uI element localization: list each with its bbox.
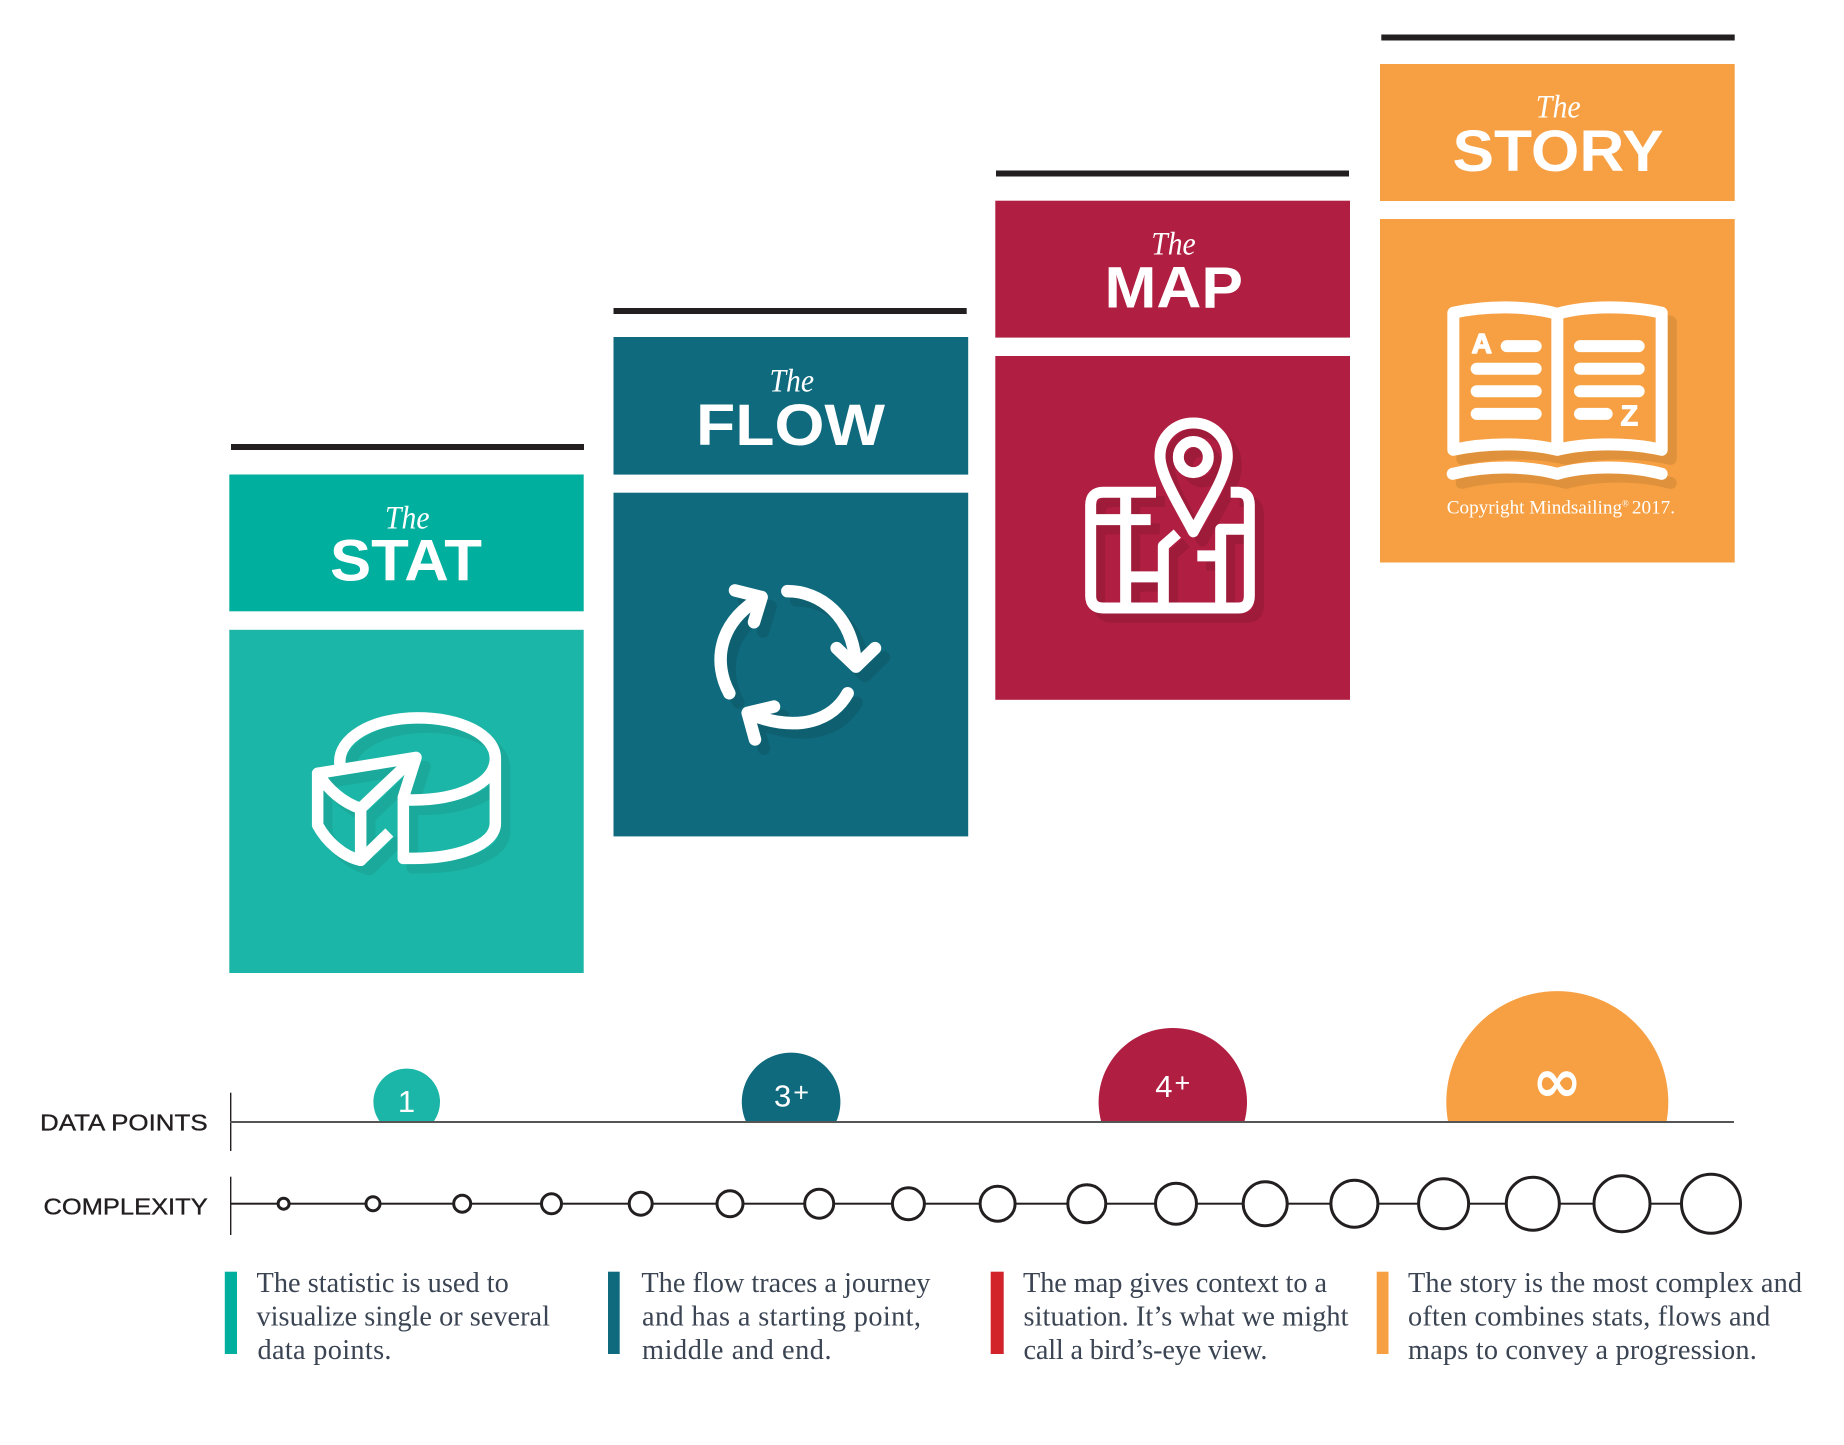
header: the story: STORY xyxy=(1452,119,1664,184)
label: data points: DATA POINTS xyxy=(40,1110,208,1136)
description: map: The map gives context to a xyxy=(1023,1268,1327,1299)
header: the stat xyxy=(229,474,584,611)
description: stat xyxy=(225,1268,550,1366)
header: the stat: The xyxy=(385,500,430,536)
body: the flow xyxy=(614,493,968,836)
header: the story: The xyxy=(1536,89,1581,125)
bubble: 4+ xyxy=(1099,1028,1247,1122)
description: story: maps to convey a progression. xyxy=(1408,1335,1757,1366)
panel: the flow xyxy=(614,308,968,836)
description: stat: data points. xyxy=(258,1335,392,1366)
bubble: 1: 1 xyxy=(398,1084,415,1119)
icon: open book: A xyxy=(1472,328,1492,359)
bubble: 1 xyxy=(373,1069,440,1122)
description: flow: and has a starting point, xyxy=(642,1302,921,1332)
header: the story xyxy=(1380,64,1735,201)
panel: the map xyxy=(995,170,1350,700)
bubble: 4+: 4 xyxy=(1155,1069,1173,1104)
icon: open book xyxy=(1453,307,1671,483)
description: story: The story is the most complex and xyxy=(1408,1268,1802,1299)
header: the map xyxy=(995,201,1350,338)
icon: cycle arrows xyxy=(721,590,884,749)
description: story: often combines stats, flows and xyxy=(1408,1302,1770,1332)
icon: open book: Z xyxy=(1620,400,1638,432)
header: the flow: The xyxy=(770,363,814,399)
copyright: 2017. xyxy=(1632,498,1675,518)
description: map: situation. It’s what we might xyxy=(1024,1302,1349,1332)
description: story xyxy=(1377,1268,1802,1366)
copyright: ® xyxy=(1622,498,1629,508)
body: the map xyxy=(995,356,1350,700)
panel: the story xyxy=(1380,34,1735,562)
body: the stat xyxy=(229,630,584,973)
chart: data points axis and bubbles xyxy=(230,991,1734,1151)
header: the flow: FLOW xyxy=(696,393,886,458)
bubble: 3+: + xyxy=(793,1078,809,1108)
header: the flow xyxy=(614,337,968,475)
panel: the stat xyxy=(229,444,584,973)
description: flow: middle and end. xyxy=(642,1335,832,1366)
body: the story xyxy=(1380,219,1735,562)
description: stat: visualize single or several xyxy=(256,1302,550,1332)
bubble: 4+: + xyxy=(1175,1068,1190,1098)
description: map: call a bird’s-eye view. xyxy=(1024,1335,1268,1366)
label: complexity: COMPLEXITY xyxy=(44,1194,208,1220)
description: stat: The statistic is used to xyxy=(256,1268,509,1299)
description: map xyxy=(991,1268,1349,1366)
copyright: Copyright Mindsailing xyxy=(1447,498,1622,518)
icon: map with pin xyxy=(1091,423,1258,617)
chart: complexity scale xyxy=(230,1174,1740,1235)
icon: pie chart xyxy=(318,718,504,870)
bubble: 3+ xyxy=(742,1053,840,1122)
bubble: infinity xyxy=(1446,991,1668,1122)
description: flow xyxy=(608,1268,931,1366)
header: the stat: STAT xyxy=(330,529,482,594)
bubble: 3+: 3 xyxy=(774,1078,791,1114)
bubble: infinity: ∞ xyxy=(1532,1046,1582,1116)
header: the map: MAP xyxy=(1104,256,1243,321)
header: the map: The xyxy=(1151,227,1196,263)
description: flow: The flow traces a journey xyxy=(641,1268,931,1299)
